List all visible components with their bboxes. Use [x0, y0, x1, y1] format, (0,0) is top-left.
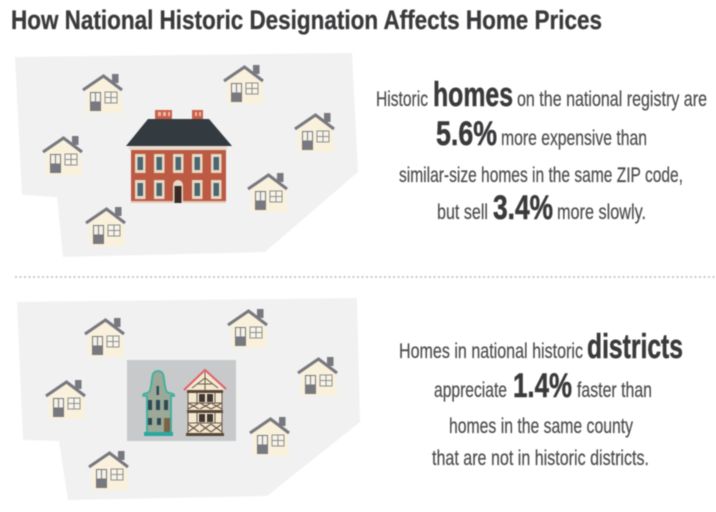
icon: half-timbered house: [184, 370, 226, 436]
text block: historic districts finding: Homes in national historic: [399, 339, 583, 363]
text block: historic homes finding: 3.4%: [493, 189, 553, 227]
map area: neighborhood: [15, 53, 358, 257]
icon: small house 5: [248, 173, 287, 212]
icon: small house 6: [89, 451, 128, 490]
text block: historic homes finding: more slowly.: [557, 200, 646, 224]
text block: historic districts finding: faster than: [577, 378, 652, 402]
icon: small house 4: [43, 136, 82, 175]
title: How National Historic Designation Affects Home Prices: [11, 5, 602, 35]
text block: historic districts finding: districts: [587, 328, 683, 366]
text block: historic districts finding: [399, 328, 683, 470]
icon: small house 1: [85, 318, 124, 357]
map area: county: [17, 298, 360, 500]
text block: historic homes finding: [376, 76, 707, 227]
text block: historic homes finding: but sell: [437, 200, 488, 224]
icon: small house 2: [224, 65, 263, 104]
icon: small house 1: [83, 74, 122, 113]
icon: small house 6: [86, 207, 125, 246]
icon: Dutch gabled townhouse: [143, 371, 174, 436]
text block: historic homes finding: 5.6%: [436, 115, 497, 153]
text block: historic districts finding: homes in the same county: [449, 414, 633, 438]
text block: historic districts finding: 1.4%: [513, 367, 572, 405]
text block: historic homes finding: homes: [433, 76, 513, 114]
panel: historic homes map: [15, 53, 358, 257]
historic district block: [127, 360, 236, 441]
text block: historic homes finding: more expensive than: [501, 126, 647, 150]
icon: small house 3: [298, 357, 337, 396]
icon: small house 2: [228, 309, 267, 348]
icon: small house 5: [250, 417, 289, 456]
icon: brick historic mansion: [126, 110, 232, 203]
text block: historic homes finding: Historic: [376, 87, 428, 111]
panel: historic districts map: [17, 298, 360, 500]
text block: historic districts finding: that are not in historic districts.: [432, 446, 649, 470]
icon: small house 4: [46, 380, 85, 419]
icon: small house 3: [295, 113, 334, 152]
text block: historic districts finding: appreciate: [434, 378, 507, 402]
